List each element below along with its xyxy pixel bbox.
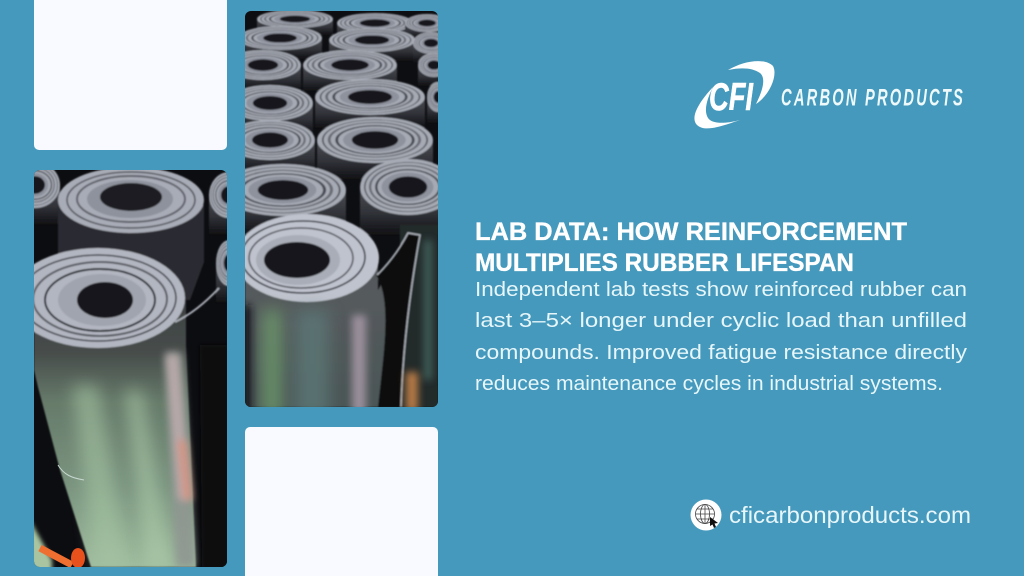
heading: LAB DATA: HOW REINFORCEMENT (475, 218, 907, 246)
icon: globe with cursor (690, 500, 722, 530)
body paragraph: compounds. Improved fatigue resistance directly (475, 342, 967, 364)
front roll face (235, 214, 379, 302)
right black edge (201, 543, 227, 567)
orange tie (40, 548, 72, 565)
front roll face (34, 246, 186, 349)
sheet tail (175, 288, 219, 322)
body paragraph: reduces maintenance cycles in industrial systems. (475, 373, 943, 395)
photo: rubber rolls, left panel (34, 170, 227, 567)
scratches (58, 465, 84, 480)
right strip behind the front roll (400, 225, 438, 407)
front roll body (34, 300, 196, 567)
website link (690, 500, 971, 530)
white card: bottom centre (245, 427, 438, 576)
rear roll dark side (58, 205, 204, 300)
logo swoosh upper (728, 61, 774, 104)
body paragraph: last 3–5× longer under cyclic load than unfilled (475, 310, 967, 332)
logo CFI wordmark: CFI (709, 76, 754, 119)
white card: top left (34, 0, 227, 150)
heading (475, 218, 907, 277)
website address: cficarbonproducts.com (729, 502, 971, 528)
front roll body (245, 266, 387, 407)
photo: rubber rolls, centre panel (245, 11, 438, 407)
heading: MULTIPLIES RUBBER LIFESPAN (475, 249, 854, 277)
logo company name: CARBON PRODUCTS (781, 85, 963, 112)
highlights (262, 310, 282, 420)
logo swoosh lower (694, 87, 740, 128)
body paragraph (475, 279, 967, 395)
sheet tail gap (376, 233, 420, 407)
pale patch bottom left (34, 521, 56, 567)
highlights (72, 385, 128, 567)
logo: CFI Carbon Products (694, 61, 963, 128)
body paragraph: Independent lab tests show reinforced rubber can (475, 279, 967, 301)
